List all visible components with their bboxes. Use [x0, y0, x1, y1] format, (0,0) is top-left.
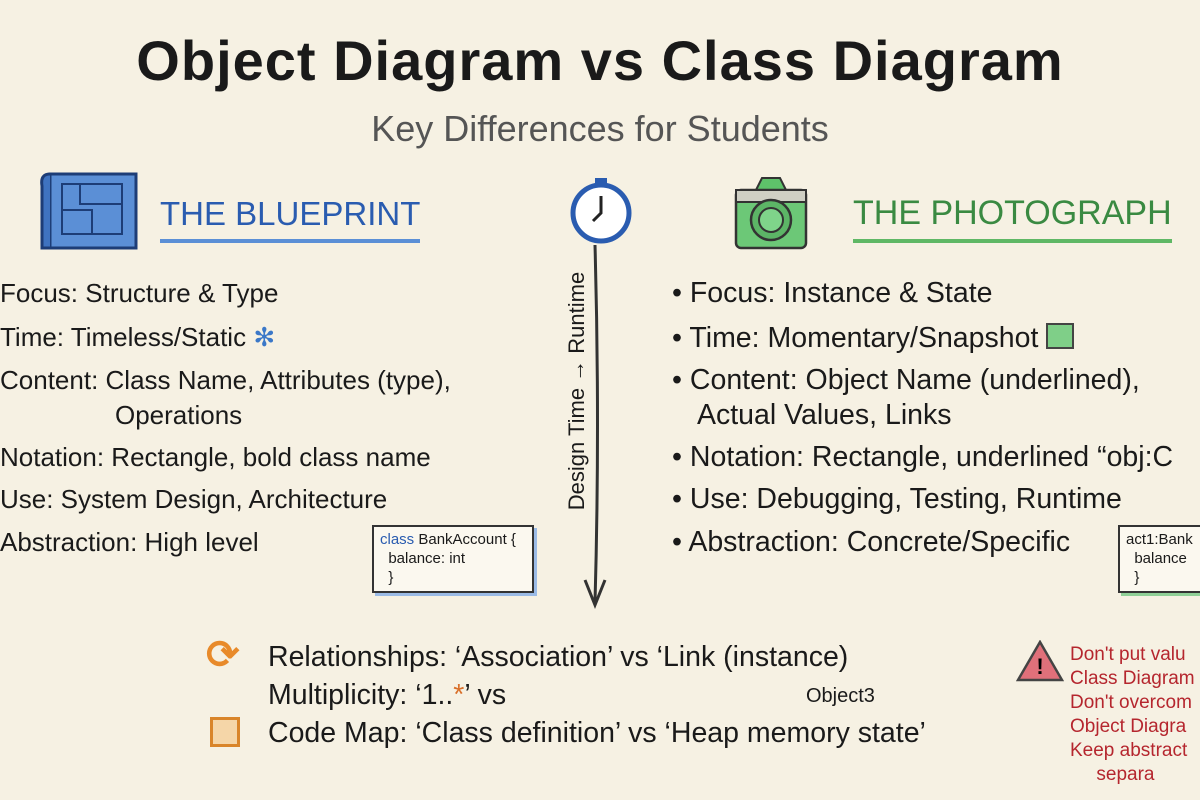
icon: code map — [210, 717, 240, 747]
code box: class: } — [388, 569, 393, 586]
panel: object diagram list: • Focus: Instance & State — [672, 277, 992, 309]
icon: camera — [734, 177, 808, 250]
bottom text block: Multiplicity: ‘1..*’ vs — [268, 679, 506, 711]
title: Object Diagram vs Class Diagram — [136, 29, 1064, 92]
panel: object diagram list: • Abstraction: Concrete/Specific — [672, 526, 1070, 558]
heading: the photograph: THE PHOTOGRAPH — [853, 194, 1172, 232]
callout: warnings — [1070, 644, 1195, 785]
bottom text block: Relationships: ‘Association’ vs ‘Link (instance) — [268, 641, 848, 673]
panel: object diagram list: • Content: Object Name (underlined), — [672, 364, 1140, 396]
panel: class diagram list — [0, 278, 451, 557]
panel: class diagram list: Use: System Design, Architecture — [0, 484, 387, 514]
code box: class: class BankAccount { — [380, 531, 516, 548]
panel: class diagram list: Notation: Rectangle, bold class name — [0, 442, 431, 472]
icon: warning — [1016, 640, 1064, 682]
bottom text block — [268, 641, 926, 749]
callout: warnings: Keep abstract — [1070, 740, 1187, 761]
bottom text block: Code Map: ‘Class definition’ vs ‘Heap memory state’ — [268, 717, 926, 749]
panel: object diagram list — [672, 277, 1173, 558]
panel: object diagram list: • Time: Momentary/Snapshot — [672, 322, 1038, 354]
icon: warning: ! — [1036, 654, 1044, 679]
callout: warnings: Object Diagra — [1070, 716, 1186, 737]
code box: object: } — [1134, 569, 1139, 586]
arrow: timeline — [584, 245, 606, 609]
code box: class: balance: int — [388, 550, 465, 567]
panel: object diagram list: • Notation: Rectangle, underlined “obj:C — [672, 441, 1173, 473]
label: design time to runtime: Design Time → Runtime — [564, 272, 589, 510]
icon: blueprint — [40, 172, 138, 250]
subtitle: Key Differences for Students — [371, 108, 829, 149]
code box: object: balance — [1134, 550, 1187, 567]
callout: warnings: Class Diagram — [1070, 668, 1195, 689]
panel: class diagram list: Abstraction: High level — [0, 527, 259, 557]
panel: object diagram list: Actual Values, Links — [697, 399, 952, 431]
code box: object: act1:Bank — [1126, 531, 1193, 548]
panel: class diagram list: Operations — [115, 400, 242, 430]
icon: clock — [570, 178, 632, 244]
callout: warnings: Don't overcom — [1070, 692, 1192, 713]
callout: warnings: Don't put valu — [1070, 644, 1186, 665]
bottom text block: Object3 — [806, 685, 875, 707]
panel: class diagram list: Content: Class Name, Attributes (type), — [0, 365, 451, 395]
panel: class diagram list: Time: Timeless/Static ✻ — [0, 322, 275, 352]
code box: class — [372, 525, 534, 593]
panel: class diagram list: Focus: Structure & Type — [0, 278, 278, 308]
icon: cycle arrows: ⟳ — [206, 633, 240, 677]
heading: the blueprint: THE BLUEPRINT — [160, 195, 420, 232]
panel: object diagram list: • Use: Debugging, Testing, Runtime — [672, 483, 1122, 515]
callout: warnings: separa — [1096, 764, 1154, 785]
code box: object — [1118, 525, 1200, 593]
